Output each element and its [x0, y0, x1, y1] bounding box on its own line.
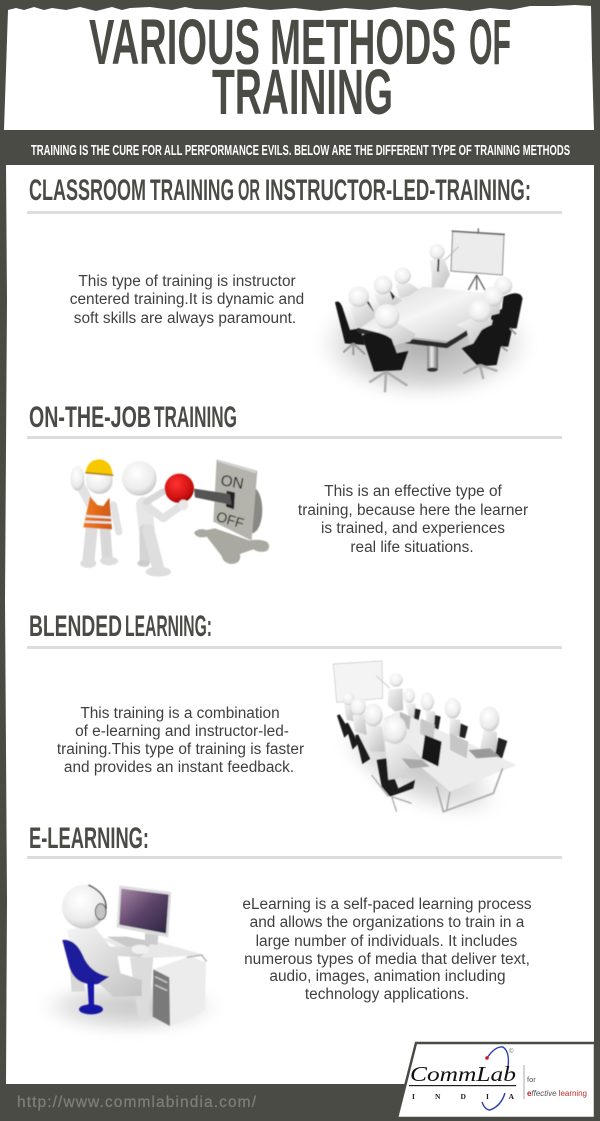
logo: CommLab India [397, 1030, 600, 1121]
heading: blended learning: BLENDED [29, 610, 122, 643]
text: on-the-job description: This is an effective type of [324, 483, 503, 500]
worker [79, 483, 119, 562]
text: on-the-job description [298, 483, 528, 556]
illustration: classroom meeting table [318, 228, 532, 398]
desk [102, 938, 205, 958]
panel: top title panel [4, 5, 594, 130]
table and laptops [383, 712, 517, 792]
back-left people [395, 283, 423, 298]
tower [153, 956, 206, 1026]
text: blended description [57, 705, 304, 776]
text: blended description: of e-learning and instructor-led- [75, 723, 289, 740]
section: on-the-job training [27, 401, 562, 577]
person [67, 925, 147, 997]
left row chairs [338, 715, 368, 762]
logo: CommLab India: © [509, 1048, 514, 1055]
title: VARIOUS [89, 6, 260, 78]
section: classroom training [27, 174, 562, 398]
heading: on-the-job training: ON-THE-JOB [29, 401, 151, 434]
heading: classroom training: CLASSROOM [29, 174, 146, 207]
text: on-the-job description: is trained, and experiences [321, 520, 505, 537]
heading: blended learning: LEARNING: [125, 610, 212, 643]
illustration: e-learning workstation [40, 885, 220, 1033]
illustration: on off switch [70, 459, 269, 577]
front left person and chair [377, 322, 416, 348]
front right person and chair [456, 318, 493, 345]
title: TRAINING [212, 56, 393, 128]
heading: classroom training: TRAINING [150, 174, 234, 207]
front person [377, 758, 415, 797]
logo: CommLab India: CommLab [410, 1062, 516, 1086]
footer bar [0, 1084, 420, 1121]
monitor [145, 933, 158, 945]
heading: e-learning: E-LEARNING: [29, 822, 149, 855]
chair [62, 940, 109, 984]
text: blended description: This training is a combination [80, 705, 280, 722]
section: blended learning [27, 610, 562, 838]
section: e-learning [27, 822, 562, 1033]
text: e-learning description [242, 896, 532, 1003]
text: e-learning description: and allows the organizations to train in a [250, 914, 525, 931]
lever and switch [194, 528, 269, 564]
text: e-learning description: technology applications. [305, 986, 469, 1003]
heading: on-the-job training: TRAINING [154, 401, 237, 434]
table [427, 343, 438, 370]
logo: CommLab India: I N D I A [412, 1092, 515, 1101]
heading: classroom training: OR [238, 174, 260, 207]
footer url: http://www.commlabindia.com/ [17, 1094, 257, 1111]
illustration: computer classroom [326, 661, 517, 838]
text: OF [469, 6, 511, 78]
text: e-learning description: eLearning is a self-paced learning process [242, 896, 532, 913]
text: classroom description: centered training.It is dynamic and [70, 291, 304, 308]
text: on-the-job description: training, because here the learner [298, 502, 528, 519]
text: classroom description [70, 273, 304, 327]
title [89, 6, 511, 128]
illustration: on off switch: OFF [214, 508, 246, 531]
text: on-the-job description: real life situations. [350, 539, 474, 556]
text: e-learning description: audio, images, animation including [269, 968, 506, 985]
text: blended description: and provides an instant feedback. [64, 759, 294, 776]
text: blended description: training.This type of training is faster [57, 741, 304, 758]
heading: classroom training [29, 174, 531, 207]
right chairs [500, 293, 523, 328]
logo: CommLab India: effective learning [527, 1089, 587, 1098]
right row people [404, 688, 415, 703]
text: e-learning description: numerous types of media that deliver text, [244, 951, 530, 968]
title: METHODS [270, 6, 456, 78]
logo: CommLab India: for [527, 1075, 536, 1084]
trainer [144, 492, 182, 568]
text: e-learning description: large number of individuals. It includes [256, 933, 518, 950]
text: classroom description: soft skills are always paramount. [74, 310, 296, 327]
illustration: on off switch: ON [219, 472, 245, 493]
text: classroom description: This type of training is instructor [78, 273, 296, 290]
